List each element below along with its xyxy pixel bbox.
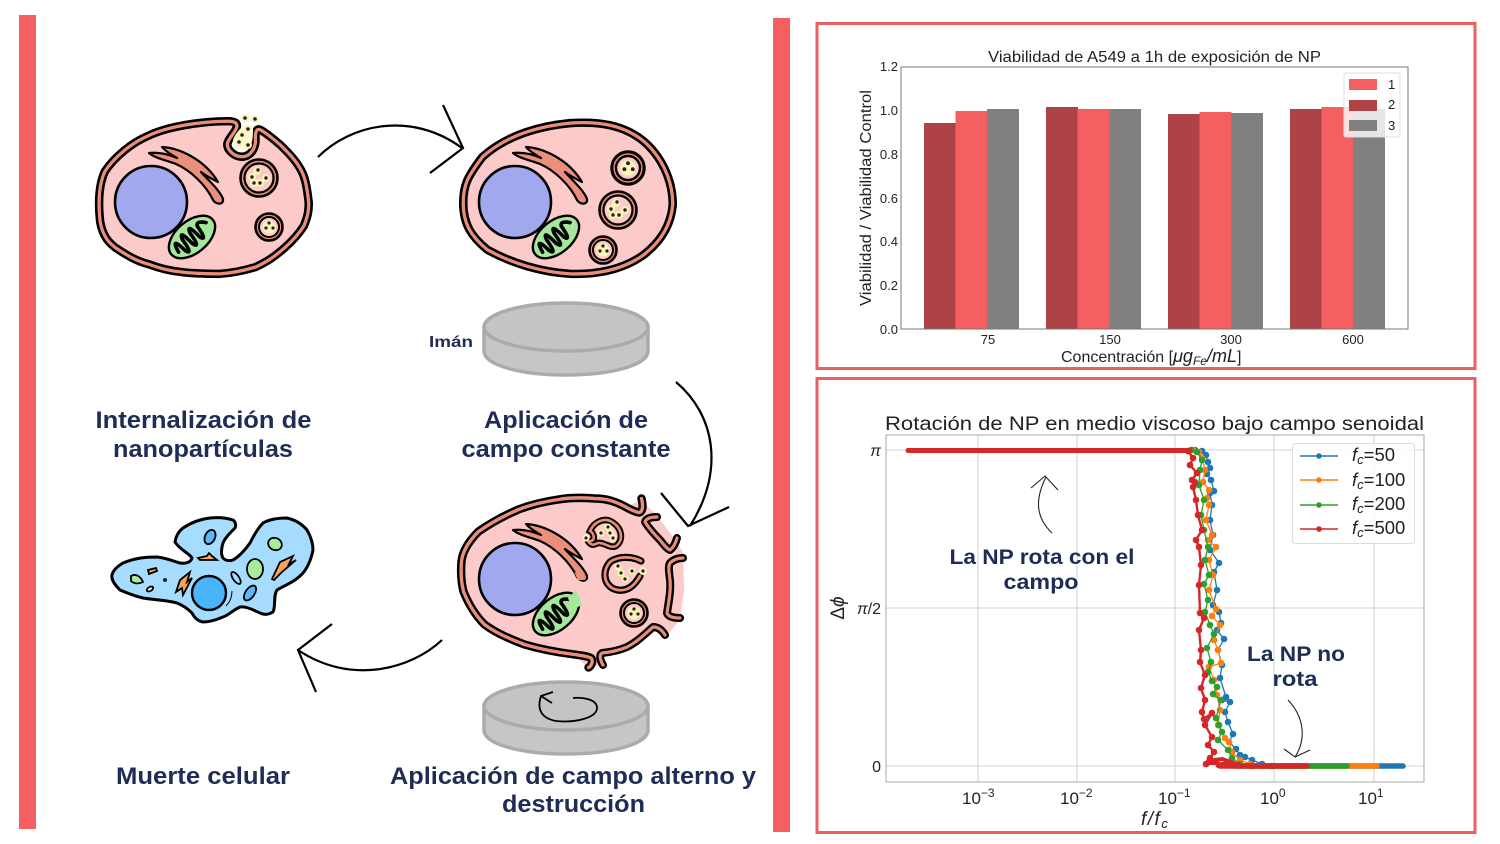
curve: fc=500 [908, 450, 1307, 766]
y axis ticks: 0.6 [880, 191, 898, 206]
x axis label: c [1161, 816, 1169, 831]
curve: fc=100 [1193, 450, 1377, 766]
heading: internalization: Internalización de [96, 407, 312, 434]
x axis ticks: 10 [962, 789, 981, 808]
y axis ticks: π [870, 443, 881, 460]
magnet: constant field [484, 303, 648, 375]
heading: constant field: campo constante [462, 436, 670, 463]
heading: internalization: nanopartículas [113, 436, 293, 463]
arrow: step 3 to 4 [298, 624, 442, 692]
legend [1344, 73, 1400, 137]
x axis label: ] [1237, 349, 1241, 366]
cell: internalization [99, 114, 309, 274]
x axis ticks: 0 [1279, 786, 1286, 800]
y axis ticks [880, 59, 898, 337]
legend: f [1352, 469, 1359, 490]
arrow: step 1 to 2 [318, 105, 463, 173]
legend: =500 [1364, 517, 1405, 538]
x axis ticks: 300 [1220, 332, 1242, 347]
annotation: does not rotate: La NP no [1247, 643, 1345, 666]
x axis ticks: 10 [1358, 789, 1377, 808]
heading: alternating field: destrucción [502, 791, 645, 818]
annotation: does not rotate: rota [1272, 668, 1318, 691]
y axis ticks: π/2 [857, 601, 881, 618]
legend: =200 [1364, 493, 1405, 514]
annotation: rotates with field: campo [1004, 571, 1078, 594]
x axis ticks [962, 786, 1384, 808]
x axis ticks: 1 [1377, 786, 1384, 800]
x axis label: f/f [1141, 809, 1161, 830]
arrow: down to baseline [1284, 700, 1310, 757]
arrow: up to plateau [1031, 476, 1058, 533]
x axis ticks: 10 [1260, 789, 1279, 808]
y axis ticks: 0.8 [880, 147, 898, 162]
legend: c [1357, 525, 1364, 540]
legend: f [1352, 444, 1359, 465]
annotation: does not rotate [1247, 643, 1345, 691]
x axis ticks: 10 [1060, 789, 1079, 808]
cell: alternating field and destruction [460, 497, 684, 668]
panel: rotation chart [817, 378, 1475, 832]
x axis label: /mL [1205, 346, 1237, 366]
magnet: alternating field [484, 682, 648, 754]
cell: death [112, 518, 313, 622]
heading: constant field: Aplicación de [484, 407, 648, 434]
panel: viability chart [817, 24, 1475, 368]
axes frame [901, 67, 1408, 329]
axes frame [886, 435, 1424, 782]
x axis ticks: 75 [981, 332, 995, 347]
x axis ticks: 600 [1342, 332, 1364, 347]
y axis ticks [857, 443, 881, 776]
middle accent bar [773, 18, 790, 832]
legend: =50 [1364, 444, 1395, 465]
left accent bar [19, 15, 36, 829]
cell: constant field [463, 123, 673, 274]
y axis ticks: 0.2 [880, 278, 898, 293]
x axis label: Concentración [μg [1061, 346, 1193, 366]
x axis ticks: 150 [1099, 332, 1121, 347]
grid lines [886, 435, 1424, 782]
chart title: Viabilidad de A549 a 1h de exposición de NP [988, 49, 1321, 66]
curve: fc=50 [1195, 450, 1403, 766]
heading: cell death: Muerte celular [116, 763, 290, 790]
legend: 1 [1388, 77, 1395, 92]
y axis ticks: 0.0 [880, 322, 898, 337]
y axis label: Δϕ [828, 596, 849, 620]
y axis ticks: 1.2 [880, 59, 898, 74]
annotation: rotates with field: La NP rota con el [950, 546, 1134, 569]
legend: 3 [1388, 118, 1395, 133]
x axis ticks: −1 [1177, 786, 1191, 800]
mitochondrion rupture [568, 590, 582, 610]
x axis ticks: −2 [1079, 786, 1093, 800]
x axis ticks: 10 [1158, 789, 1177, 808]
y axis ticks: 0.4 [880, 234, 898, 249]
y axis ticks: 1.0 [880, 103, 898, 118]
curves [908, 450, 1403, 766]
x axis ticks [981, 332, 1364, 347]
annotation: rotates with field [950, 546, 1134, 594]
bars [924, 107, 1385, 329]
heading: alternating field [390, 763, 757, 818]
legend: =100 [1364, 469, 1405, 490]
curve: fc=200 [1191, 450, 1347, 766]
legend: c [1357, 452, 1364, 467]
legend [1292, 444, 1414, 544]
legend: c [1357, 477, 1364, 492]
heading: alternating field: Aplicación de campo alterno y [390, 763, 757, 790]
heading: constant field [462, 407, 670, 463]
legend: f [1352, 493, 1359, 514]
arrow: step 2 to 3 [661, 382, 729, 526]
legend: c [1357, 501, 1364, 516]
label: Imán: Imán [429, 334, 473, 351]
y axis ticks: 0 [872, 759, 881, 776]
x axis ticks: −3 [981, 786, 995, 800]
x axis label: Fe [1193, 354, 1207, 368]
legend: 2 [1388, 97, 1395, 112]
legend: f [1352, 517, 1359, 538]
heading: internalization [96, 407, 312, 463]
y axis label: Viabilidad / Viabilidad Control [858, 90, 875, 306]
chart title: Rotación de NP en medio viscoso bajo campo senoidal [885, 414, 1424, 435]
